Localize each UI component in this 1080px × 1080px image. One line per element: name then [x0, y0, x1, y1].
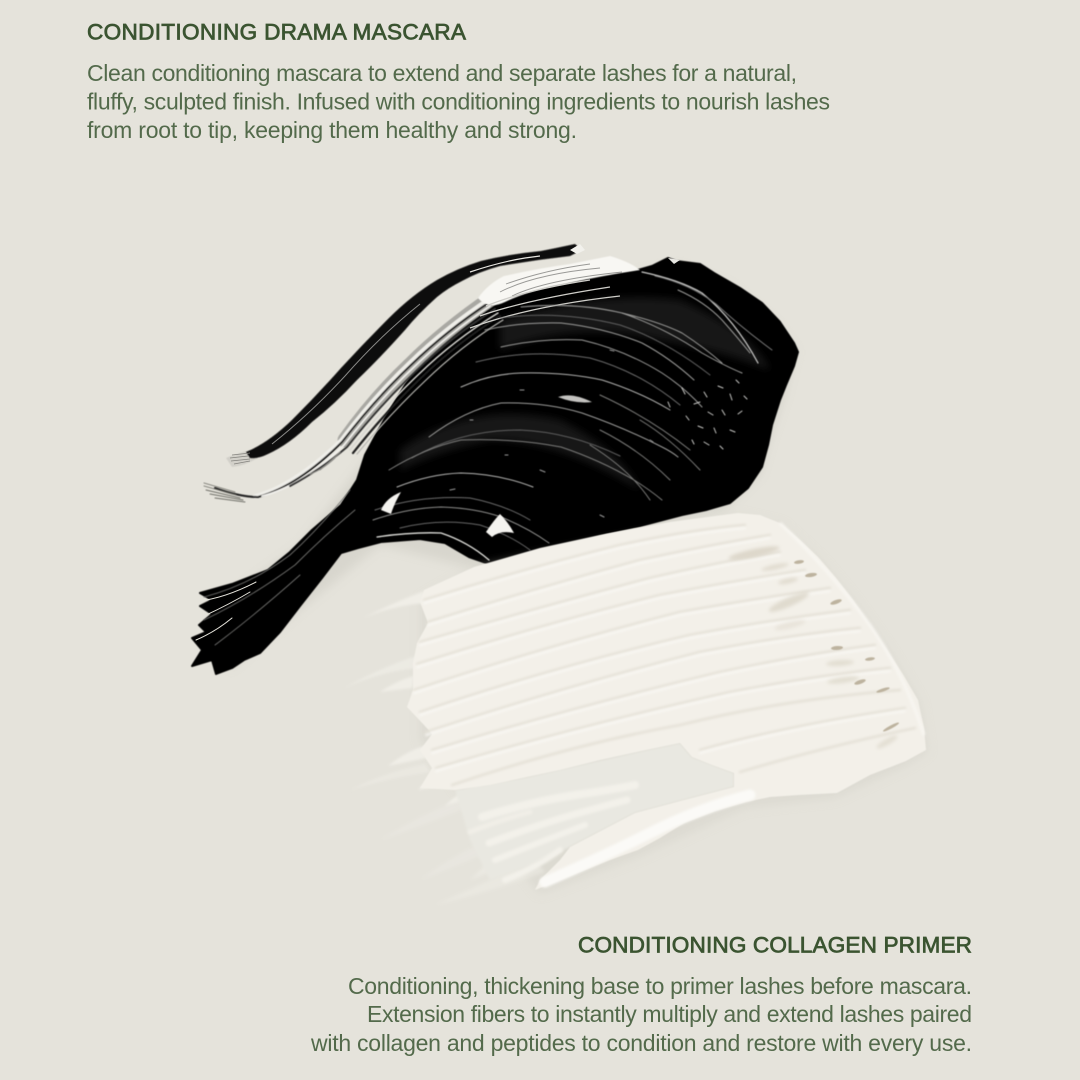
matte sheen on upper mascara [400, 298, 770, 490]
description: collagen primer: Extension fibers to instantly multiply and extend lashes paired [367, 1001, 972, 1027]
text block: collagen primer [310, 932, 972, 1056]
primer ridge shadows [414, 525, 915, 785]
wet strands at lower edge [470, 785, 750, 882]
bright rim of primer tip [780, 523, 924, 735]
soft shadow under mascara [210, 266, 796, 670]
heading: drama mascara: CONDITIONING DRAMA MASCARA [87, 20, 467, 44]
description: collagen primer: Conditioning, thickening base to primer lashes before mascara. [348, 973, 972, 999]
swatch: cream collagen primer smear [344, 513, 928, 905]
description: drama mascara: Clean conditioning mascara to extend and separate lashes for a natural, [87, 60, 797, 86]
faint wisps at left of primer [344, 591, 485, 806]
description: collagen primer [310, 973, 972, 1056]
description: collagen primer: with collagen and peptides to condition and restore with every use. [310, 1030, 972, 1056]
swatch: black mascara smear [192, 244, 798, 674]
description: drama mascara: from root to tip, keeping them healthy and strong. [87, 117, 577, 143]
faint fading fingers at lower left [380, 795, 545, 905]
crumpled glossy texture [450, 350, 747, 517]
white froth at top of stroke [470, 244, 680, 328]
description: drama mascara [87, 60, 830, 143]
glossy ridges on mascara [204, 272, 772, 645]
tan shaded grooves at primer tip [728, 544, 900, 751]
text block: drama mascara [87, 20, 830, 143]
white gloss highlights [381, 395, 592, 537]
mascara body [192, 258, 798, 674]
gray streaked second tail [204, 298, 503, 502]
fan splits at lower tail [196, 582, 256, 640]
translucent gap in primer [455, 743, 734, 880]
description: drama mascara: fluffy, sculpted finish. Infused with conditioning ingredients to nourish lashes [87, 88, 830, 114]
soft shadow under primer [420, 515, 928, 894]
primer ridge highlights [414, 528, 905, 771]
upper thin lash stroke [226, 244, 582, 467]
primer body [407, 513, 926, 890]
heading: collagen primer: CONDITIONING COLLAGEN PRIMER [578, 932, 972, 958]
